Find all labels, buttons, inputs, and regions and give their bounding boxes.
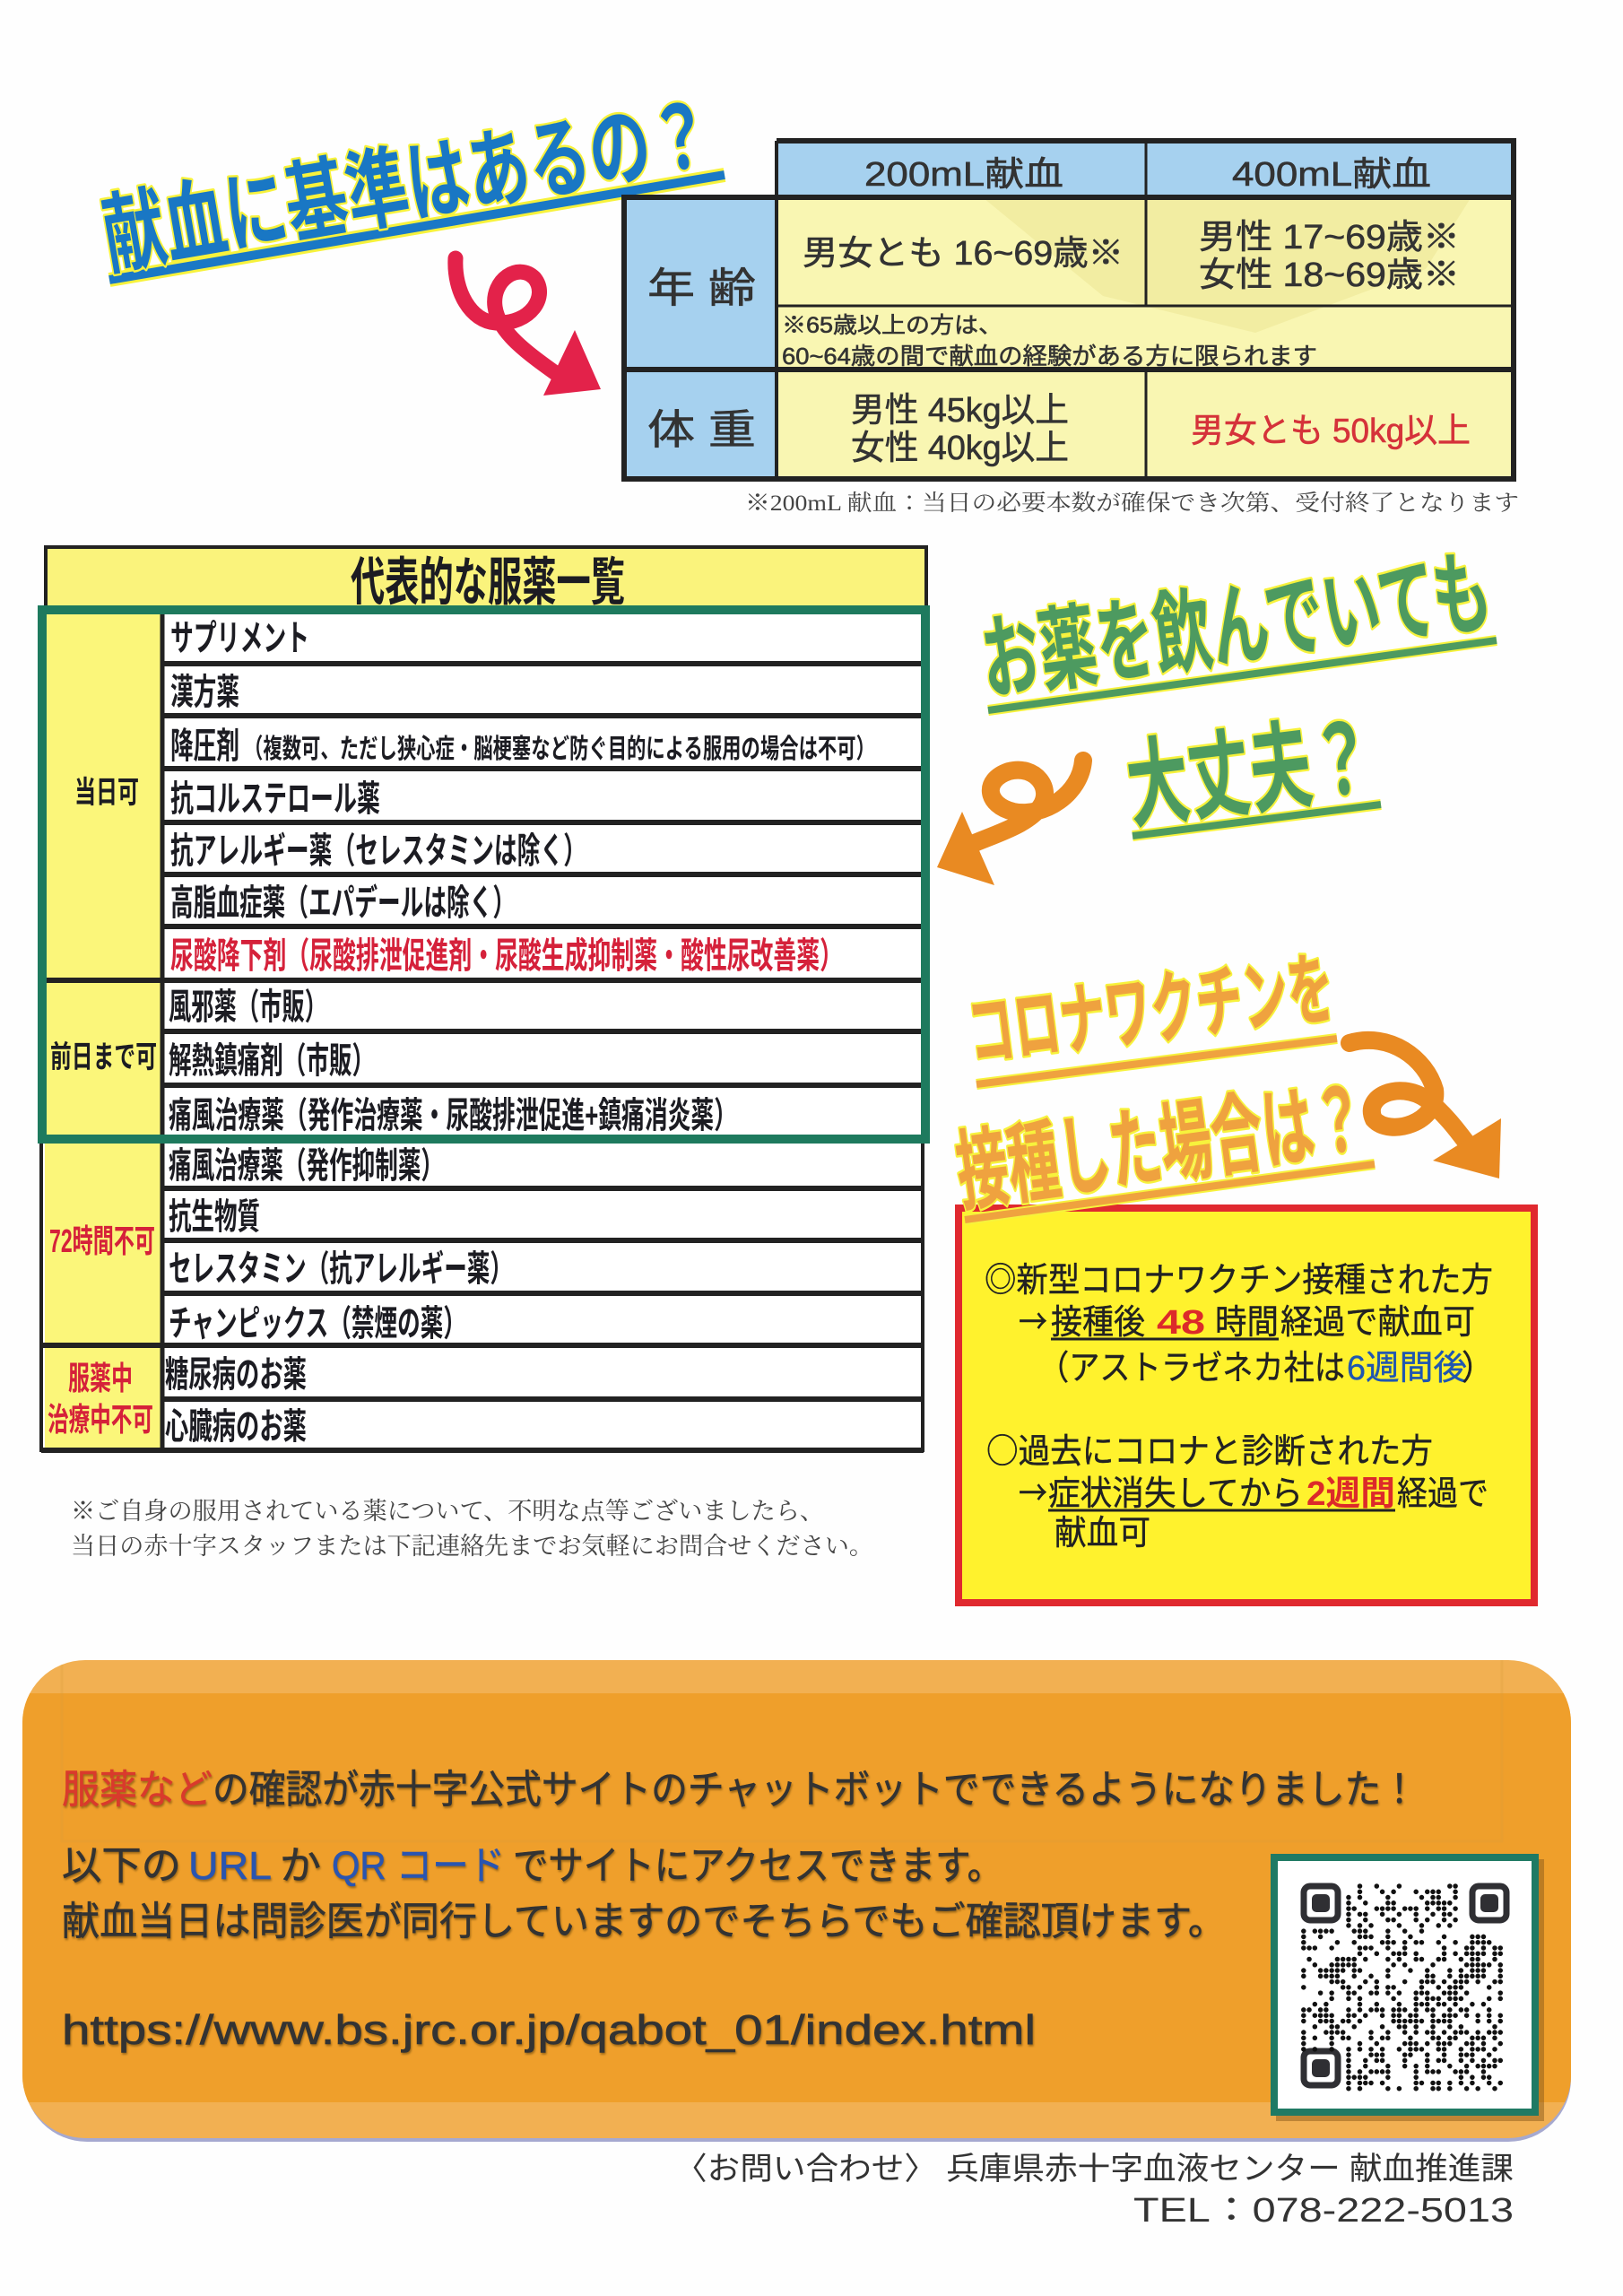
panel: orange chatbot notice <box>22 1650 1571 2142</box>
group label: 72 hours: 72時間不可 <box>49 1222 155 1259</box>
panel: vaccine box <box>959 1208 1534 1603</box>
48 hours line: 時間 <box>1215 1294 1279 1344</box>
group label: same day: 当日可 <box>74 776 139 810</box>
line 2: 以下の <box>62 1844 181 1888</box>
column header: 400mL: 400mL献血 <box>1232 156 1431 194</box>
age 200mL: 男女とも 16~69歳※ <box>803 235 1124 273</box>
medication rows: 解熱鎮痛剤（市販） <box>169 1041 375 1081</box>
medication rows: 漢方薬 <box>170 673 239 712</box>
arrow: orange curl to vaccine box <box>1350 1040 1501 1178</box>
arrow: orange curl to medication table <box>937 761 1083 885</box>
medication rows: 降圧剤 <box>170 726 239 766</box>
table title: 代表的な服薬一覧 <box>351 553 625 612</box>
medication rows: セレスタミン（抗アレルギー薬） <box>169 1249 513 1289</box>
panel: medication table <box>41 545 926 1450</box>
medication rows: 糖尿病のお薬 <box>165 1355 307 1395</box>
heading: covid vaccine question <box>950 944 1375 1222</box>
line 2: か <box>280 1844 321 1888</box>
2 weeks line: → <box>1019 1465 1047 1515</box>
age 400mL <box>1199 219 1460 294</box>
medication rows: 抗アレルギー薬（セレスタミンは除く） <box>170 831 586 871</box>
heading: covid vaccine question: コロナワクチンを <box>963 944 1339 1078</box>
heading: medication question: 大丈夫？ <box>1121 703 1379 841</box>
age note: 60~64歳の間で献血の経験がある方に限られます <box>782 343 1317 370</box>
footnote: ※ご自身の服用されている薬について、不明な点等ございましたら、 <box>71 1498 824 1525</box>
medication rows: 高脂血症薬（エパデールは除く） <box>170 883 516 923</box>
medication rows: サプリメント <box>170 619 309 658</box>
2 weeks line: 経過で <box>1397 1465 1488 1515</box>
donation OK: 献血可 <box>1055 1505 1150 1554</box>
heading: blood donation criteria: 献血に基準はあるの？ <box>96 85 719 286</box>
group label: until previous day: 前日まで可 <box>50 1040 157 1074</box>
medication rows: 風邪薬（市販） <box>169 987 327 1027</box>
group label: during treatment: 服薬中 <box>68 1360 133 1396</box>
medication rows <box>165 619 875 1447</box>
48 hours line: 48 <box>1157 1304 1205 1342</box>
48 hours line: → <box>1019 1294 1047 1344</box>
green highlight frame <box>42 610 925 1139</box>
contact information <box>674 2152 1514 2230</box>
medication rows: 心臓病のお薬 <box>165 1407 307 1447</box>
heading: medication question <box>976 541 1497 841</box>
line 3: 献血当日は問診医が同行していますのでそちらでもご確認頂けます。 <box>62 1900 1226 1944</box>
arrow: red curl pointing to table <box>456 258 601 396</box>
weight 200mL <box>851 392 1069 467</box>
previous infection heading: ○過去にコロナと診断された方 <box>986 1423 1433 1473</box>
group label: during treatment <box>48 1360 153 1438</box>
row header: weight: 体 重 <box>647 406 756 453</box>
medication rows: 尿酸降下剤（尿酸排泄促進剤・尿酸生成抑制薬・酸性尿改善薬） <box>170 936 843 976</box>
age note <box>782 313 1317 370</box>
line 1: 服薬など <box>62 1768 213 1812</box>
group label: during treatment: 治療中不可 <box>48 1401 153 1438</box>
line 2 <box>62 1844 1002 1888</box>
contact information: TEL：078-222-5013 <box>1133 2192 1514 2230</box>
medication rows: 痛風治療薬（発作治療薬・尿酸排泄促進+鎮痛消炎薬） <box>169 1096 737 1135</box>
AstraZeneca line: 6週間後 <box>1347 1350 1467 1387</box>
weight 200mL: 女性 40kg以上 <box>851 430 1069 467</box>
vaccinated heading: ◎新型コロナワクチン接種された方 <box>985 1252 1493 1301</box>
age 400mL: 女性 18~69歳※ <box>1199 257 1460 294</box>
row header: age: 年 齢 <box>647 265 756 311</box>
panel: criteria table <box>624 141 1514 479</box>
note under criteria table: ※200mL 献血：当日の必要本数が確保でき次第、受付終了となります <box>745 491 1519 516</box>
medication rows: 痛風治療薬（発作抑制薬） <box>169 1146 444 1186</box>
line 2: URL <box>188 1844 272 1888</box>
footnote <box>71 1498 873 1560</box>
line 2: QR コード <box>332 1844 505 1888</box>
age 400mL: 男性 17~69歳※ <box>1199 219 1460 257</box>
AstraZeneca line: （アストラゼネカ社は <box>1038 1340 1345 1389</box>
48 hours line: 接種後 <box>1051 1294 1145 1344</box>
weight 400mL: 男女とも 50kg以上 <box>1191 413 1471 450</box>
footnote: 当日の赤十字スタッフまたは下記連絡先までお気軽にお問合せください。 <box>71 1533 873 1560</box>
medication rows: （複数可、ただし狭心症・脳梗塞など防ぐ目的による服用の場合は不可） <box>244 735 875 764</box>
heading: blood donation criteria <box>96 85 725 286</box>
line 1: の確認が赤十字公式サイトのチャットボットでできるようになりました！ <box>213 1768 1418 1812</box>
AstraZeneca line: ） <box>1462 1340 1494 1389</box>
column header: 200mL: 200mL献血 <box>864 156 1063 194</box>
2 weeks line <box>1019 1465 1488 1515</box>
weight 200mL: 男性 45kg以上 <box>851 392 1069 430</box>
medication rows: チャンピックス（禁煙の薬） <box>169 1304 466 1344</box>
medication rows: 抗生物質 <box>169 1197 260 1237</box>
2 weeks line: 症状消失してから <box>1048 1465 1303 1515</box>
48 hours line <box>1019 1294 1475 1344</box>
contact information: 〈お問い合わせ〉 兵庫県赤十字血液センター 献血推進課 <box>674 2152 1514 2187</box>
48 hours line: 経過で献血可 <box>1280 1294 1475 1344</box>
medication rows: 抗コルステロール薬 <box>170 779 380 819</box>
line 2: でサイトにアクセスできます。 <box>513 1844 1002 1888</box>
chatbot URL: https://www.bs.jrc.or.jp/qabot_01/index.html <box>62 2006 1036 2053</box>
QR code card <box>1274 1857 1544 2121</box>
2 weeks line: 2週間 <box>1306 1475 1395 1513</box>
age note: ※65歳以上の方は、 <box>782 313 1002 338</box>
